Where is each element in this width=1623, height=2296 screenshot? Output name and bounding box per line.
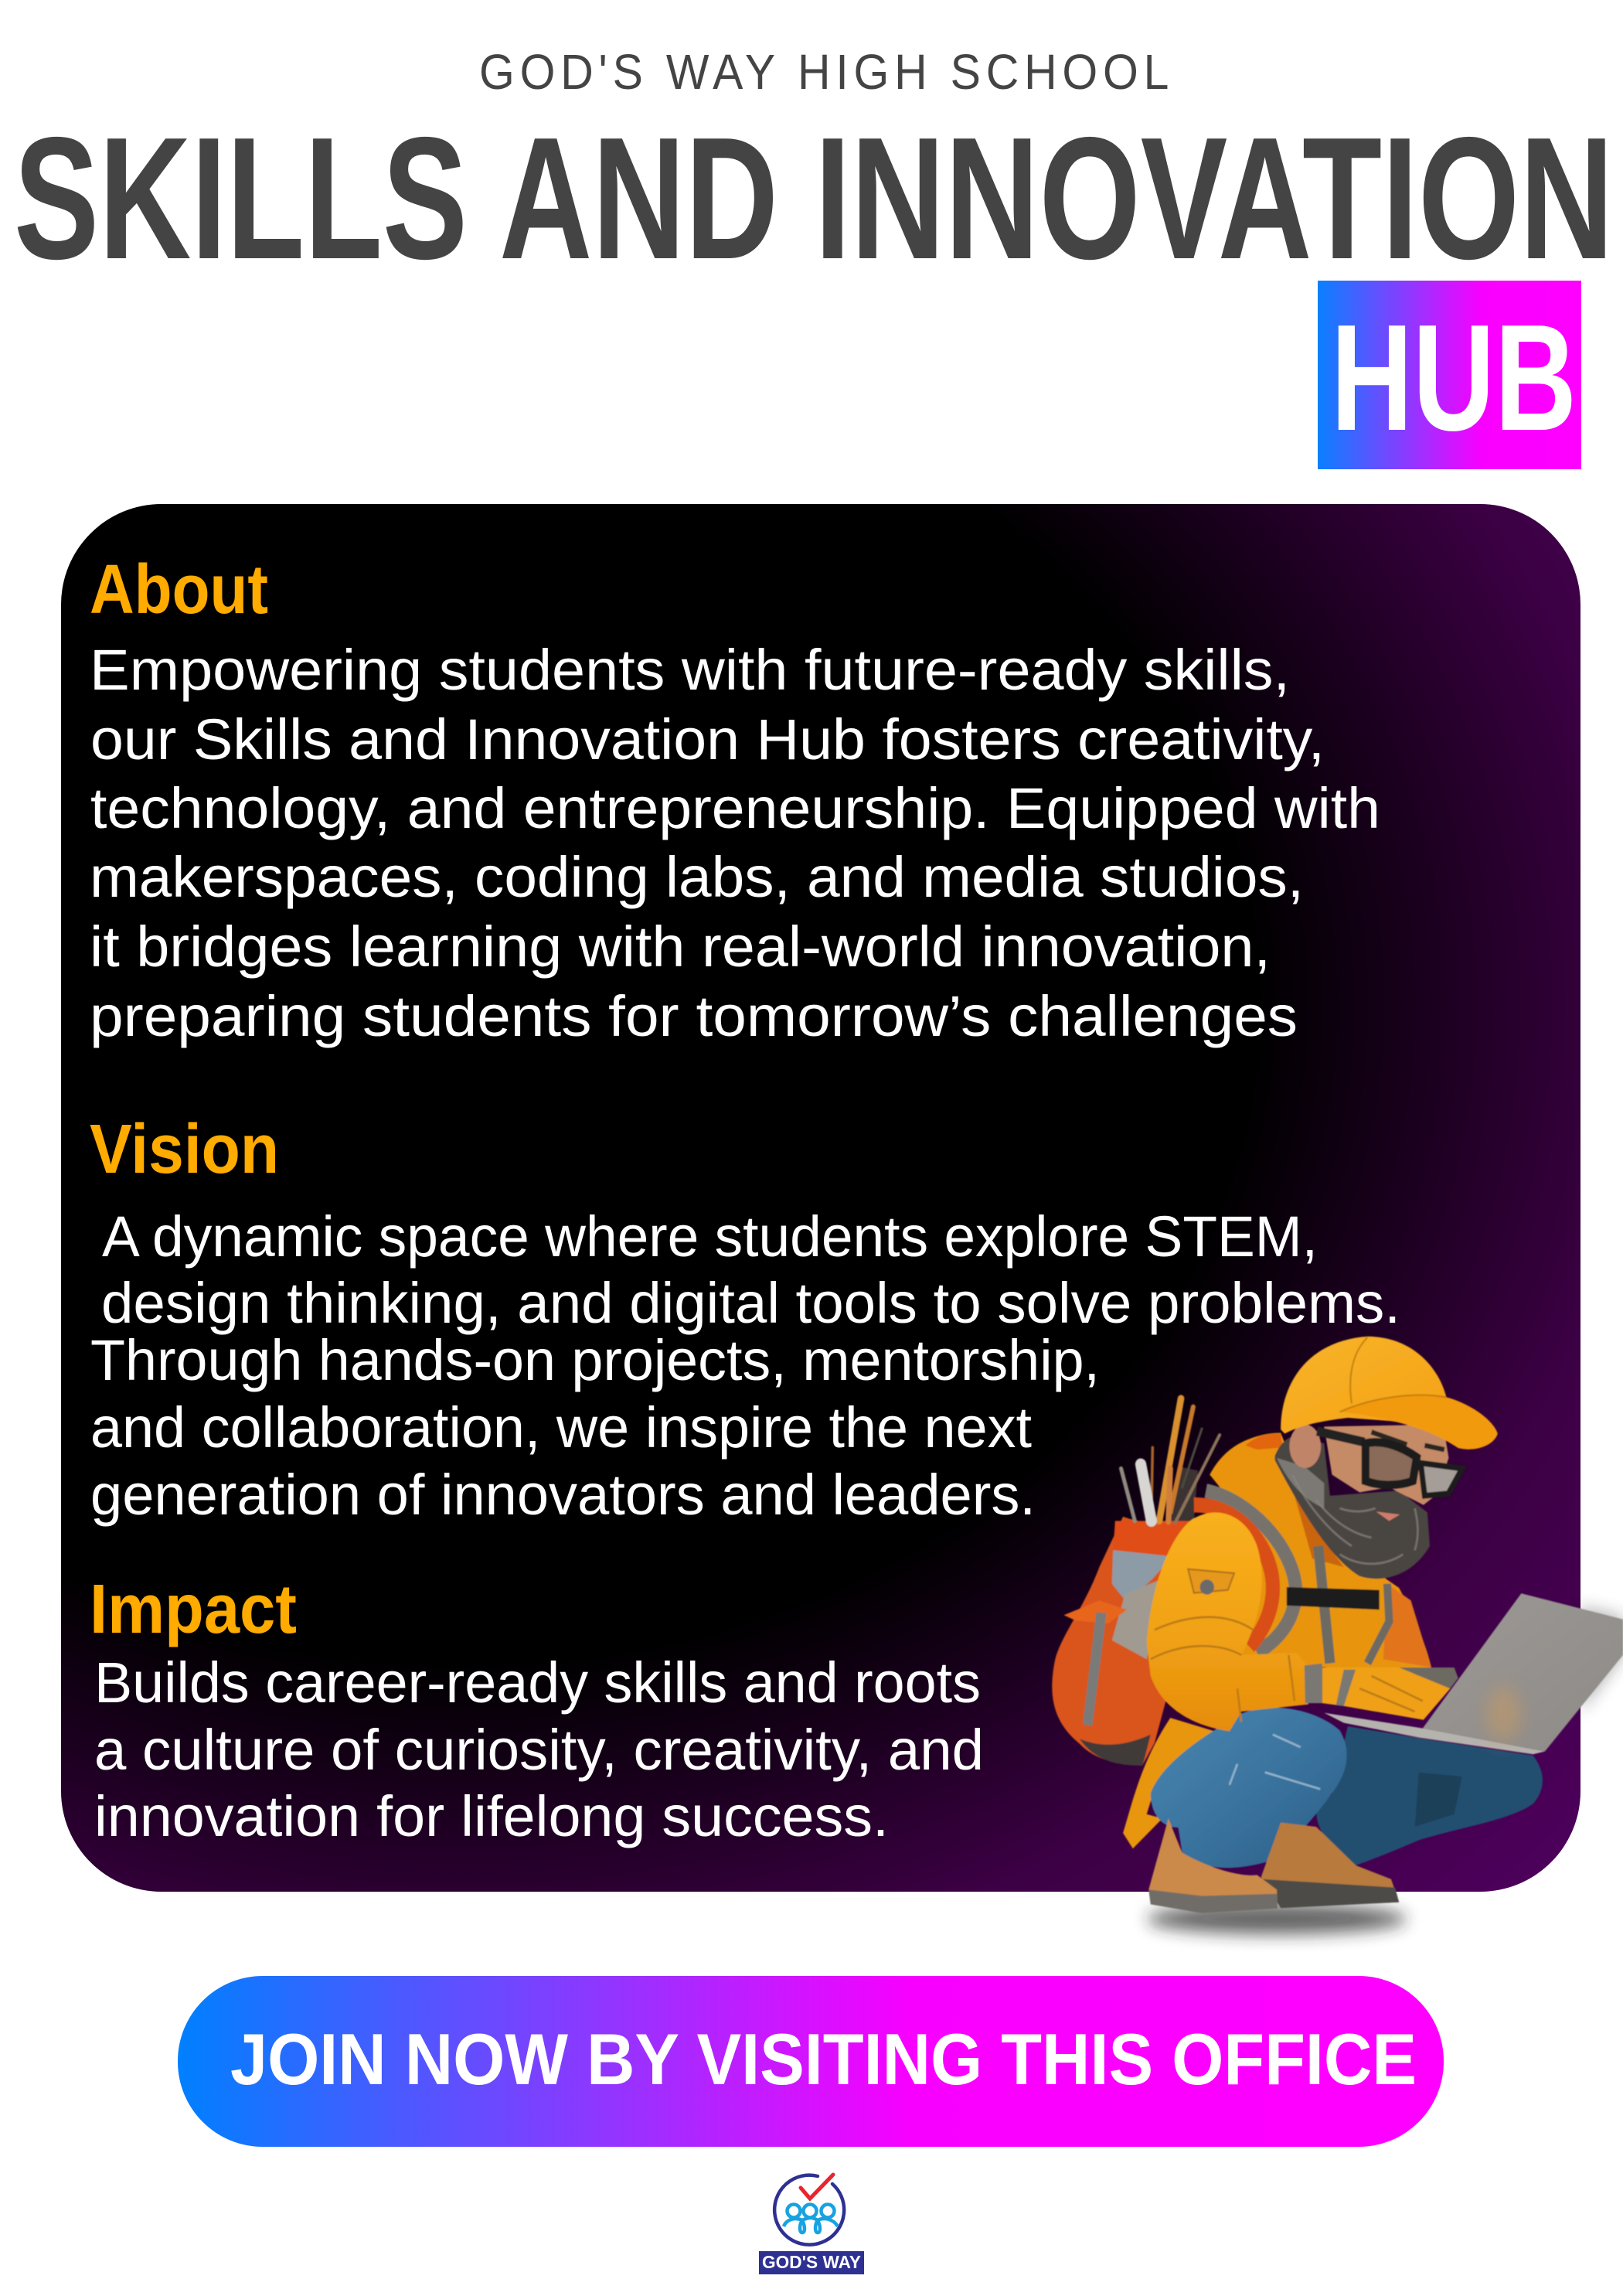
heading: about: About <box>90 551 268 629</box>
text block: about: technology, and entrepreneurship. Equipped with <box>90 776 1380 840</box>
text block: impact: innovation for lifelong success. <box>94 1784 889 1848</box>
panel background <box>61 504 1580 1892</box>
eyebrows <box>1371 1432 1444 1449</box>
panel: about, vision, impact <box>61 504 1580 1892</box>
text block: vision <box>90 1204 1400 1527</box>
pencils in backpack <box>1121 1398 1220 1523</box>
glasses <box>1317 1431 1462 1496</box>
logo people <box>784 2205 838 2233</box>
text block: vision: Through hands-on projects, mentorship, <box>90 1328 1100 1392</box>
text block: about: our Skills and Innovation Hub fosters creativity, <box>90 707 1325 772</box>
text block: about: preparing students for tomorrow’s challenges <box>90 984 1298 1048</box>
text block: about: Empowering students with future-ready skills, <box>90 638 1290 702</box>
boots <box>1148 1818 1399 1913</box>
beard and hair <box>1274 1436 1430 1579</box>
chest strap <box>1287 1587 1380 1610</box>
heading: impact: Impact <box>90 1571 297 1648</box>
text block: about <box>90 638 1380 1048</box>
text block: impact: Builds career-ready skills and roots <box>94 1650 981 1715</box>
mouth <box>1376 1511 1400 1521</box>
text block: vision: A dynamic space where students explore STEM, <box>102 1204 1318 1269</box>
logo name: GOD'S WAY <box>762 2252 861 2272</box>
ear <box>1289 1425 1321 1468</box>
call to action button: JOIN NOW BY VISITING THIS OFFICE <box>230 2018 1417 2100</box>
main title <box>14 100 1614 295</box>
jacket tail <box>1123 1718 1226 1848</box>
text block: about: makerspaces, coding labs, and media studios, <box>90 845 1304 909</box>
text block: vision: design thinking, and digital tools to solve problems. <box>101 1271 1400 1335</box>
backpack <box>1052 1517 1202 1766</box>
jacket torso <box>1210 1432 1431 1678</box>
text block: impact <box>94 1650 984 1848</box>
school name: GOD'S WAY HIGH SCHOOL <box>479 45 1169 100</box>
logo checkmark <box>801 2175 833 2199</box>
shoulder straps <box>1194 1490 1389 1664</box>
call to action button <box>178 1976 1444 2147</box>
logo: God's Way <box>759 2175 864 2274</box>
cap <box>1281 1337 1498 1449</box>
text block: vision: generation of innovators and leaders. <box>90 1463 1036 1527</box>
main title: AND <box>499 100 778 295</box>
text block: impact: a culture of curiosity, creativity, and <box>94 1718 984 1782</box>
laptop shadow <box>1580 1606 1623 1712</box>
text block: about: it bridges learning with real-world innovation, <box>90 915 1271 979</box>
heading: vision: Vision <box>90 1111 279 1188</box>
jacket arm <box>1147 1512 1458 1731</box>
main title: SKILLS <box>14 100 468 295</box>
jeans <box>1151 1708 1543 1868</box>
logo banner <box>759 2251 864 2274</box>
ground shadow <box>1147 1904 1407 1934</box>
laptop <box>1324 1593 1623 1754</box>
icon: crouching man with backpack and laptop <box>1052 1337 1623 1934</box>
logo ring <box>774 2175 844 2245</box>
text block: vision: and collaboration, we inspire the next <box>90 1395 1032 1460</box>
face <box>1324 1425 1448 1505</box>
